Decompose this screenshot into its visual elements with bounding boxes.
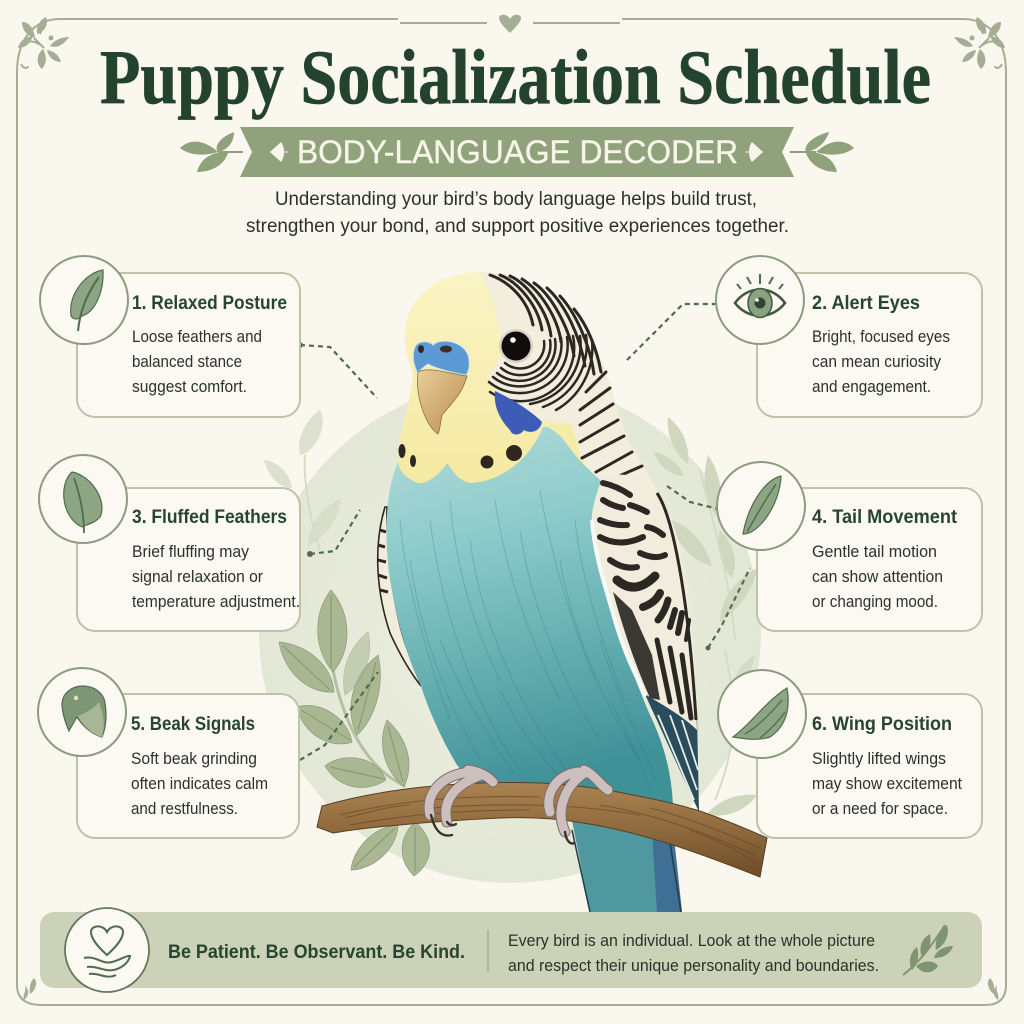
body text: may show excitement [812,775,962,793]
bird eye [499,329,533,363]
body text: and engagement. [812,378,931,396]
corner ornament: bottom right [988,978,998,1000]
body text: or changing mood. [812,593,938,611]
body text: Bright, focused eyes [812,328,950,346]
body text: and restfulness. [131,800,238,818]
body text [132,543,300,611]
body text: balanced stance [132,353,242,371]
icon: rounded leaf [64,472,102,533]
corner ornament: bottom left [24,978,36,1000]
heading: 1. Relaxed Posture [132,292,287,314]
heading: 3. Fluffed Feathers [132,506,287,528]
panel: 3 fluffed feathers [39,455,300,631]
pale background foliage [264,410,757,816]
body text [812,543,943,611]
bird tail [568,790,682,912]
body feather texture [400,490,660,790]
heading: 5. Beak Signals [131,713,255,735]
footer text: and respect their unique personality and boundaries. [508,956,879,975]
body text: can mean curiosity [812,353,942,371]
green leaf sprig [279,590,430,876]
icon: feather [71,270,103,331]
panel: 4 tail movement [717,462,982,631]
icon: eye [735,274,785,318]
striped nape [480,272,657,490]
icon: heart in hand [65,908,149,992]
body text: often indicates calm [131,775,268,793]
body text: Soft beak grinding [131,750,257,768]
background circle [259,381,761,883]
icon: long feather [743,476,781,534]
body text [131,750,268,818]
body text: can show attention [812,568,943,586]
intro text: strengthen your bond, and support positive experiences together. [246,215,789,237]
icon: heart ornament [499,15,521,33]
bird body [386,425,673,808]
bird head [398,272,657,490]
icon: footer sprig [903,925,953,975]
footer text [508,931,879,975]
icon: left banner sprig [180,132,243,172]
blue cheek patch [495,391,542,434]
body text: Loose feathers and [132,328,262,346]
panel: 1 relaxed posture [40,256,300,417]
heading: 2. Alert Eyes [812,292,920,314]
banner subtitle: BODY-LANGUAGE DECODER [297,134,738,170]
icon: right banner sprig [790,132,854,172]
body text: Gentle tail motion [812,543,937,561]
bird beak [417,370,467,434]
banner ornaments [270,142,763,162]
body text: Brief fluffing may [132,543,250,561]
body text: or a need for space. [812,800,948,818]
bird right wing [592,474,697,730]
intro text [246,188,789,237]
corner ornament: top left [17,17,69,72]
heading: 4. Tail Movement [812,506,957,528]
body text: signal relaxation or [132,568,263,586]
corner ornament: top right [954,17,1006,72]
panel: 5 beak signals [38,668,299,838]
left foot [429,770,493,836]
right foot [549,770,608,843]
intro text: Understanding your bird’s body language helps build trust, [275,188,757,210]
icon: beak [62,686,106,737]
divider [487,930,489,972]
heading: 6. Wing Position [812,713,952,735]
body text [812,328,950,396]
connector lines [297,304,750,760]
head stripes [489,275,642,480]
wooden perch [317,782,767,877]
bird cere [413,341,469,375]
ribbon banner [240,127,794,177]
body text [132,328,262,396]
panel: 6 wing position [718,670,982,838]
illustration: budgerigar on perch [317,272,767,912]
bird flight feathers [643,690,699,812]
body text: suggest comfort. [132,378,247,396]
bird left wing edge [378,507,421,686]
footer heading: Be Patient. Be Observant. Be Kind. [168,941,465,963]
footer text: Every bird is an individual. Look at the whole picture [508,931,875,950]
icon: wing [733,688,788,739]
footer banner [40,908,982,992]
throat spots [398,444,522,468]
panel: 2 alert eyes [716,256,982,417]
body text: Slightly lifted wings [812,750,946,768]
body text [812,750,962,818]
body text: temperature adjustment. [132,593,300,611]
